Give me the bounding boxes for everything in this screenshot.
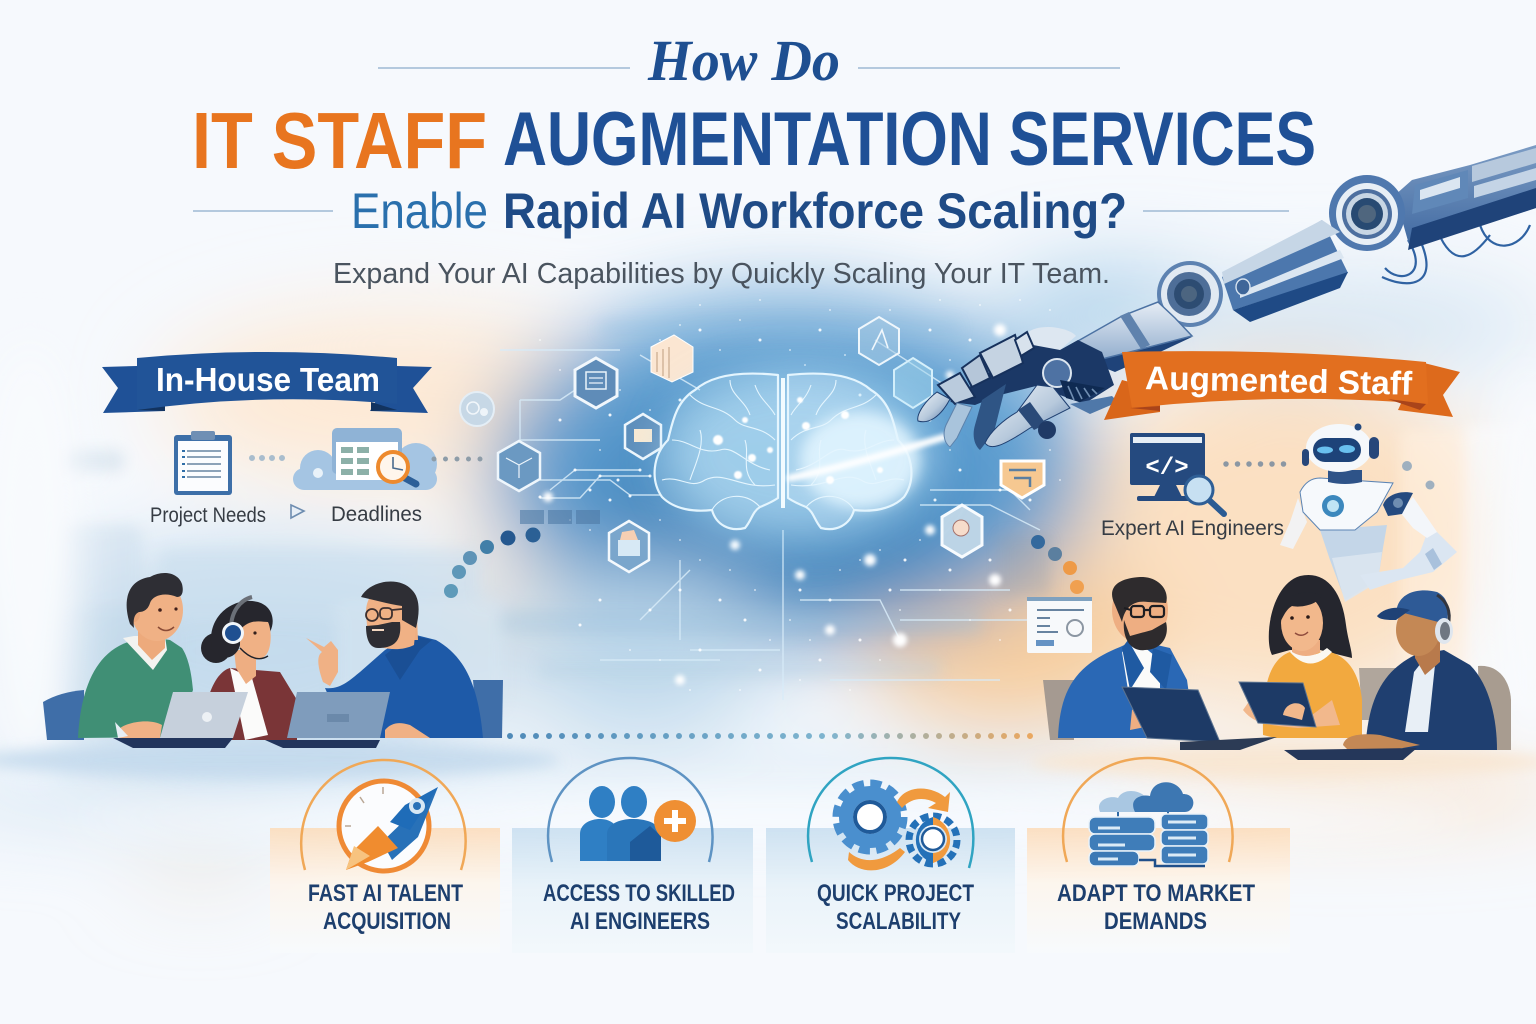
heading: Augmentation Services: AUGMENTATION SERVICES bbox=[503, 97, 1316, 182]
dots: monitor to robot bbox=[1226, 461, 1286, 467]
hex icon: cube bbox=[498, 441, 540, 491]
label: QUICK PROJECT bbox=[817, 880, 974, 907]
ribbon: augmented staff: Augmented Staff bbox=[1145, 359, 1413, 402]
elbow joint bbox=[1329, 175, 1405, 251]
icon: calendar cloud bbox=[293, 428, 437, 490]
ribbon: in-house team: In-House Team bbox=[156, 361, 380, 398]
round icon: left bbox=[460, 392, 494, 426]
arc bbox=[1063, 758, 1233, 862]
brain midline bbox=[781, 378, 785, 508]
robot right arm bbox=[1360, 532, 1457, 590]
label: FAST AI TALENT bbox=[308, 880, 463, 907]
robot hand bbox=[918, 327, 1118, 450]
panel: augmented staff bbox=[1027, 351, 1536, 778]
glowing brain bbox=[655, 370, 945, 540]
hex icon: document bbox=[575, 358, 617, 408]
panel: in-house team bbox=[0, 352, 560, 778]
brain nodes bbox=[713, 397, 883, 484]
icon: clock and rocket bbox=[339, 781, 438, 871]
bright data points bbox=[540, 300, 1120, 690]
subheading: Enable: Enable bbox=[351, 183, 488, 239]
wrist bbox=[1062, 302, 1192, 372]
tagline: Expand Your AI Capabilities by Quickly Scaling Your IT Team. bbox=[333, 258, 1110, 290]
person: man in green sweater bbox=[78, 573, 193, 738]
benefit: quick project scalability bbox=[808, 758, 974, 935]
label: ACCESS TO SKILLED bbox=[543, 880, 735, 907]
person: woman in yellow top bbox=[1243, 575, 1362, 738]
keyboard base bbox=[1180, 737, 1277, 750]
arrow: needs to deadlines bbox=[291, 505, 304, 518]
back of hand bbox=[1027, 327, 1076, 350]
tablet man bbox=[1122, 687, 1220, 742]
hex icon: outline top right bbox=[859, 317, 899, 365]
in-house team illustration bbox=[0, 573, 560, 778]
bottom tablet bbox=[1284, 748, 1417, 760]
finger three bbox=[974, 384, 1006, 450]
finger one bbox=[918, 392, 950, 422]
forearm bbox=[1222, 220, 1348, 322]
robot left arm bbox=[1280, 498, 1307, 549]
person: bearded man in blue shirt bbox=[306, 582, 483, 738]
glow sparks bbox=[528, 324, 1006, 685]
icon: small dashboard card bbox=[1027, 597, 1092, 653]
finger two bbox=[944, 403, 972, 447]
augmented staff illustration bbox=[1030, 575, 1536, 778]
dots: calendar onward bbox=[434, 456, 484, 462]
arc bbox=[808, 758, 973, 868]
table surface left bbox=[0, 742, 560, 778]
benefit: access to skilled AI engineers bbox=[543, 758, 735, 935]
person: woman with headset bbox=[201, 597, 297, 740]
energy beam from robot finger bbox=[790, 437, 945, 478]
label line two: SCALABILITY bbox=[836, 908, 961, 935]
upper arm bbox=[1395, 145, 1536, 250]
table surface right bbox=[1030, 746, 1536, 778]
hex icon: lower right bbox=[942, 505, 982, 557]
robot bbox=[1280, 424, 1457, 602]
central AI network panel bbox=[460, 300, 1120, 700]
dotted connector between teams bbox=[510, 733, 1040, 739]
laptop right bbox=[265, 692, 390, 748]
label: project needs: Project Needs bbox=[150, 504, 266, 527]
icon: clipboard bbox=[174, 431, 232, 495]
connector: dotted line left bbox=[444, 528, 540, 598]
dots: near robot bbox=[1402, 461, 1434, 490]
icon: code monitor bbox=[1130, 433, 1224, 514]
label line two: AI ENGINEERS bbox=[570, 908, 710, 935]
finger segments bbox=[938, 332, 1034, 404]
wrist joint bbox=[1157, 261, 1223, 327]
card backgrounds bbox=[270, 828, 1290, 953]
icon: people with plus bbox=[580, 786, 696, 861]
heading: How Do: How Do bbox=[647, 28, 840, 93]
thumb bbox=[985, 385, 1070, 447]
hex icon: cyan bbox=[894, 358, 932, 408]
dots: clipboard to calendar bbox=[252, 455, 292, 461]
chairs bbox=[1043, 680, 1074, 740]
hex icon: lower left bbox=[609, 521, 649, 572]
title bbox=[192, 28, 1316, 290]
arc bbox=[301, 760, 466, 870]
label: ADAPT TO MARKET bbox=[1057, 880, 1255, 907]
knuckle joint bbox=[1043, 359, 1071, 387]
arc bbox=[548, 758, 713, 862]
right brain hemisphere bbox=[788, 374, 911, 529]
heading: IT Staff: IT STAFF bbox=[192, 96, 487, 185]
icon: gears bbox=[837, 784, 957, 870]
hex icon: peach cube bbox=[651, 335, 693, 382]
label: expert AI engineers: Expert AI Engineers bbox=[1101, 517, 1284, 540]
benefit: adapt to market demands bbox=[1057, 758, 1255, 935]
circuit traces bbox=[500, 340, 1040, 700]
person: bearded man in blue blazer bbox=[1058, 577, 1195, 738]
label line two: ACQUISITION bbox=[323, 908, 451, 935]
circuit glow bars bbox=[520, 510, 600, 524]
ribbon: augmented staff bbox=[1104, 351, 1460, 420]
left brain hemisphere bbox=[655, 374, 778, 529]
connector: dotted line right bbox=[1031, 535, 1084, 594]
icon: cloud and servers bbox=[1089, 782, 1208, 866]
robot chest bbox=[1300, 478, 1393, 530]
benefit: fast AI talent acquisition bbox=[301, 760, 466, 935]
label: deadlines: Deadlines bbox=[331, 503, 422, 526]
tablet woman bbox=[1239, 682, 1316, 727]
robot head bbox=[1306, 424, 1372, 472]
panel: benefit cards bbox=[270, 758, 1290, 953]
label line two: DEMANDS bbox=[1104, 908, 1207, 935]
cables bbox=[1382, 225, 1530, 283]
robot arm bbox=[918, 145, 1536, 450]
laptop left bbox=[113, 692, 248, 748]
ribbon: in-house team bbox=[102, 352, 432, 413]
robot lower body bbox=[1320, 525, 1387, 600]
icon: code monitor: </> bbox=[1145, 455, 1189, 482]
title ornament lines bbox=[193, 68, 1289, 211]
vents bbox=[1060, 380, 1105, 402]
person: man with cap and headphones bbox=[1343, 590, 1497, 752]
hex icon: report bbox=[625, 414, 661, 459]
shield icon: right bbox=[1001, 461, 1044, 498]
subheading: Rapid AI Workforce Scaling: Rapid AI Workforce Scaling? bbox=[503, 183, 1127, 239]
chairs bbox=[43, 690, 84, 740]
